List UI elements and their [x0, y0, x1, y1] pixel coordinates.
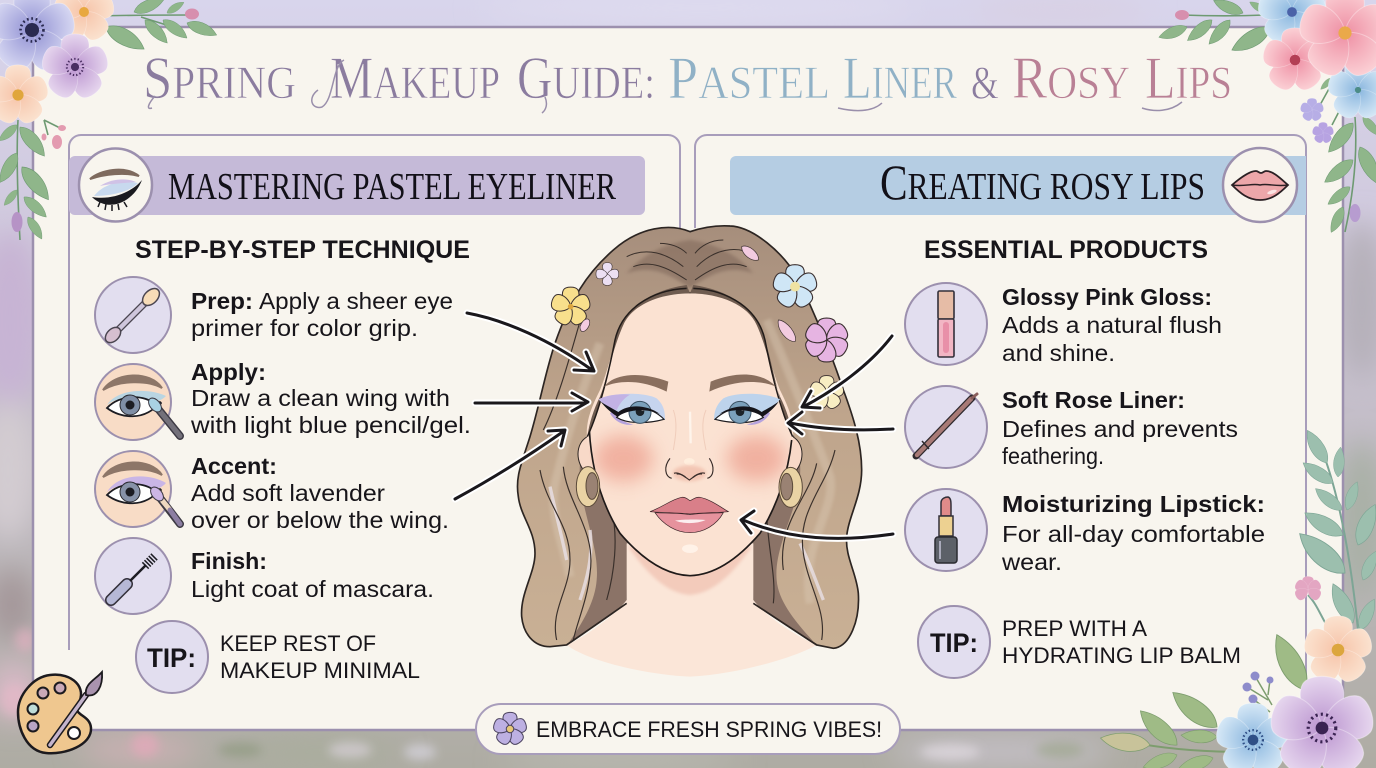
step: apply	[95, 359, 471, 440]
flower: tiny violet	[1299, 98, 1325, 122]
text: apply: Draw a clean wing with	[191, 385, 450, 411]
icon: mascara wand	[95, 538, 171, 614]
flower: peach side	[0, 65, 51, 127]
text: finish	[191, 548, 434, 602]
text: accent: Accent:	[191, 453, 277, 479]
icon: lips	[1223, 148, 1297, 222]
nose	[666, 410, 713, 481]
text: moisturizing lipstick	[1001, 491, 1265, 575]
tip: keep rest of makeup minimal	[136, 621, 420, 693]
text: moisturizing lipstick: For all-day comfortable	[1002, 521, 1265, 547]
text: glossy pink gloss: Adds a natural flush	[1002, 312, 1222, 338]
product: glossy pink gloss	[905, 283, 1222, 366]
title: LINER	[843, 45, 958, 111]
heading bar: mastering pastel eyeliner: MASTERING PASTEL EYELINER	[168, 166, 617, 208]
tip: prep with a hydrating lip balm: PREP WITH A	[1002, 616, 1147, 641]
neck shadow	[628, 547, 752, 595]
flower: pink small	[1260, 28, 1330, 94]
arrow: accent to eye	[455, 430, 565, 499]
title: PASTEL	[668, 45, 830, 111]
text: accent	[191, 453, 449, 533]
step: accent	[95, 451, 449, 533]
text: apply: with light blue pencil/gel.	[190, 412, 471, 438]
flower: periwinkle	[0, 0, 78, 75]
flower: pink bud	[1293, 576, 1323, 602]
text: prep: Prep:	[191, 288, 253, 314]
icon: lipstick	[905, 489, 987, 571]
eyebrows	[604, 375, 776, 392]
title: MAKEUP	[330, 45, 500, 111]
bottom banner: EMBRACE FRESH SPRING VIBES!	[536, 717, 882, 742]
text: prep	[191, 288, 453, 341]
icon: lip liner pencil	[905, 386, 987, 468]
neck and shoulders	[567, 543, 817, 677]
text: accent: over or below the wing.	[191, 507, 449, 533]
text: prep: primer for color grip.	[191, 315, 418, 341]
arrow: apply to eye	[475, 393, 588, 411]
bottom banner	[476, 704, 900, 754]
title: LIPS	[1145, 45, 1232, 111]
icon: paint palette and brush	[18, 672, 102, 753]
product: moisturizing lipstick	[905, 489, 1265, 575]
face	[587, 293, 793, 576]
text: prep: Apply a sheer eye	[259, 288, 453, 314]
tip: prep with a hydrating lip balm	[918, 606, 1241, 678]
icon: sponge applicator	[95, 277, 171, 353]
arrow: liner to lips	[788, 412, 893, 434]
tip: keep rest of makeup minimal: MAKEUP MINIMAL	[220, 658, 420, 683]
icon: eye with pastel liner	[79, 148, 152, 222]
product: soft rose liner	[905, 386, 1238, 469]
rosy lips	[650, 497, 728, 553]
flower: tiny lilac	[1311, 122, 1335, 144]
flower: peach	[1301, 616, 1375, 686]
tip: prep with a hydrating lip balm: TIP:	[930, 628, 978, 658]
text: apply: Apply:	[191, 359, 266, 385]
floral corner: bottom right	[1099, 427, 1376, 768]
text: accent: Add soft lavender	[191, 480, 385, 506]
text: glossy pink gloss: and shine.	[1002, 340, 1115, 366]
flower: blue	[1213, 703, 1293, 768]
heading bar: creating rosy lips	[730, 154, 1306, 215]
subheading: step-by-step technique: STEP-BY-STEP TECHNIQUE	[135, 236, 470, 264]
text: apply	[190, 359, 471, 438]
subheading: essential products: ESSENTIAL PRODUCTS	[924, 236, 1208, 264]
blush	[593, 435, 787, 482]
icon: lip gloss tube	[905, 283, 987, 365]
hair flowers and petals	[550, 246, 850, 411]
text: finish: Finish:	[191, 548, 267, 574]
hairline	[587, 285, 793, 437]
heading bar: mastering pastel eyeliner	[69, 156, 645, 215]
arrow: gloss to lips	[802, 336, 892, 408]
arrow: lipstick to lips	[741, 511, 893, 538]
floral corner: top left	[0, 0, 219, 241]
hair	[517, 226, 862, 648]
floral corner: top right	[1157, 0, 1376, 235]
text: glossy pink gloss	[1002, 284, 1222, 366]
icon: eye with light blue wing and pencil	[95, 364, 180, 440]
illustration: woman's face with pastel liner and rosy lips	[517, 226, 862, 677]
flower: orchid	[39, 34, 111, 102]
hoop earrings	[576, 467, 802, 507]
title	[143, 45, 1232, 113]
tip: keep rest of makeup minimal: KEEP REST OF	[220, 631, 376, 656]
text: soft rose liner	[1002, 387, 1238, 469]
text: soft rose liner: Soft Rose Liner:	[1002, 387, 1185, 413]
panel: mastering pastel eyeliner	[69, 135, 680, 693]
text: moisturizing lipstick: Moisturizing Lipstick:	[1002, 491, 1265, 517]
step: finish	[95, 538, 434, 614]
text: glossy pink gloss: Glossy Pink Gloss:	[1002, 284, 1212, 310]
panel: creating rosy lips	[695, 135, 1306, 690]
arrow: prep to eye	[467, 313, 594, 371]
heading bar: creating rosy lips: CREATING ROSY LIPS	[880, 154, 1205, 210]
flower: pink large	[1295, 0, 1376, 81]
left eye	[599, 394, 665, 425]
flower: purple large	[1266, 676, 1376, 768]
title: SPRING	[143, 45, 296, 111]
flower: sky top	[1255, 0, 1329, 48]
flower: sky right	[1325, 60, 1376, 122]
ears	[578, 437, 802, 473]
flower: peach top	[51, 0, 117, 44]
text: moisturizing lipstick: wear.	[1001, 549, 1062, 575]
text: soft rose liner: feathering.	[1002, 443, 1104, 469]
tip: keep rest of makeup minimal: TIP:	[147, 643, 196, 673]
title: GUIDE:	[517, 45, 655, 111]
icon: eye with lavender wing and pencil	[95, 451, 180, 527]
text: soft rose liner: Defines and prevents	[1002, 416, 1238, 442]
icon: small purple flower	[492, 712, 528, 747]
title: ROSY	[1012, 45, 1130, 111]
text: finish: Light coat of mascara.	[191, 576, 434, 602]
step: prep	[95, 277, 453, 353]
tip: prep with a hydrating lip balm: HYDRATING LIP BALM	[1002, 643, 1241, 668]
title: &	[971, 57, 999, 109]
right eye	[714, 394, 780, 425]
